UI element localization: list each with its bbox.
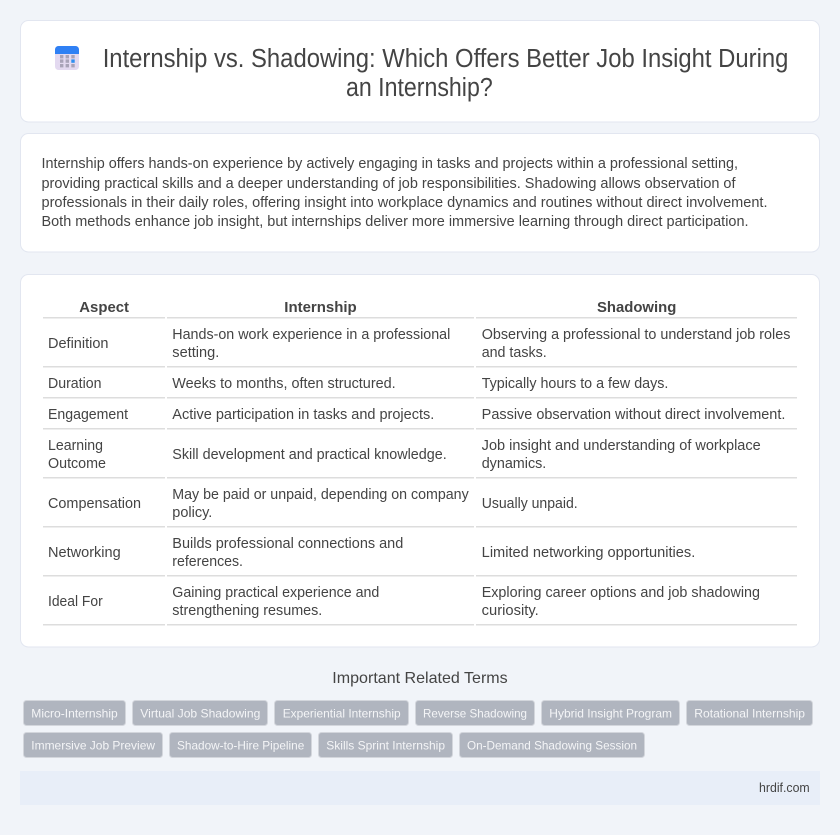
tag: shadow-to-hire pipeline: Shadow-to-Hire Pipeline: [177, 738, 305, 752]
row: learning outcome: dynamics.: [482, 456, 546, 472]
row: learning outcome: Skill development and practical knowledge.: [172, 447, 447, 463]
panel: introduction: [20, 134, 820, 252]
tag: experiential internship: Experiential Internship: [283, 706, 401, 720]
row: networking: references.: [172, 554, 243, 570]
table header: Internship: [284, 299, 357, 316]
tag: rotational internship: Rotational Internship: [694, 706, 805, 720]
row: duration: [48, 376, 668, 392]
row: networking: Builds professional connections and: [172, 536, 403, 552]
tag: reverse shadowing: Reverse Shadowing: [423, 706, 527, 720]
row: definition: setting.: [172, 345, 219, 361]
tag: reverse shadowing: [416, 700, 534, 726]
footer: [20, 771, 820, 805]
row: definition: and tasks.: [482, 345, 547, 361]
title: Internship vs. Shadowing: Which Offers Better Job Insight During: [103, 45, 788, 73]
row: ideal for: Ideal For: [48, 594, 103, 610]
tag: skills sprint internship: Skills Sprint Internship: [326, 738, 445, 752]
tag: virtual job shadowing: Virtual Job Shadowing: [140, 706, 260, 720]
footer: hrdif.com: [759, 780, 810, 795]
tag: immersive job preview: Immersive Job Preview: [31, 738, 155, 752]
tag: shadow-to-hire pipeline: [170, 732, 312, 758]
title: an Internship?: [346, 74, 493, 102]
table header: [79, 299, 676, 316]
row: engagement: Engagement: [48, 407, 128, 423]
text block: introduction paragraph: professionals in their daily roles, offering insight into workplace dynamics and routines without direct involvement.: [42, 195, 768, 211]
row: engagement: Passive observation without direct involvement.: [482, 407, 785, 423]
tag list: related terms: [24, 700, 812, 758]
table header: Shadowing: [597, 299, 676, 316]
tag: virtual job shadowing: [132, 700, 268, 726]
row: ideal for: Exploring career options and job shadowing: [482, 585, 760, 601]
row: definition: Definition: [48, 336, 108, 352]
row: learning outcome: Learning: [48, 438, 103, 454]
row: ideal for: strengthening resumes.: [172, 603, 322, 619]
row: learning outcome: [48, 438, 761, 472]
row: networking: Limited networking opportunities.: [482, 545, 695, 561]
tag: immersive job preview: [24, 732, 162, 758]
text block: introduction paragraph: Internship offers hands-on experience by actively engaging in tasks and projects within a professional setting,: [42, 156, 738, 172]
tag: rotational internship: [686, 700, 812, 726]
row: learning outcome: Job insight and understanding of workplace: [482, 438, 761, 454]
row: ideal for: curiosity.: [482, 603, 539, 619]
tag: on-demand shadowing session: [460, 732, 644, 758]
row: definition: [48, 327, 790, 361]
tag: hybrid insight program: Hybrid Insight Program: [549, 706, 672, 720]
row: ideal for: Gaining practical experience and: [172, 585, 379, 601]
text block: introduction paragraph: [42, 156, 768, 230]
row: learning outcome: Outcome: [48, 456, 106, 472]
row: networking: Networking: [48, 545, 121, 561]
panel: comparison table: [20, 274, 820, 647]
tag: skills sprint internship: [318, 732, 452, 758]
heading: important related terms: Important Related Terms: [332, 670, 508, 687]
row: networking: [48, 536, 695, 570]
tag: micro-internship: Micro-Internship: [31, 706, 118, 720]
tag: micro-internship: [24, 700, 126, 726]
row: duration: Weeks to months, often structured.: [172, 376, 396, 392]
row: compensation: policy.: [172, 505, 212, 521]
icon: calendar: [55, 46, 79, 70]
row: compensation: Compensation: [48, 496, 141, 512]
row: definition: Observing a professional to understand job roles: [482, 327, 790, 343]
row: duration: Typically hours to a few days.: [482, 376, 668, 392]
row: duration: Duration: [48, 376, 102, 392]
tag: on-demand shadowing session: On-Demand Shadowing Session: [467, 738, 637, 752]
text block: introduction paragraph: Both methods enhance job insight, but internships deliver more immersive learning through direct participation.: [42, 214, 748, 230]
table header: Aspect: [79, 299, 129, 316]
row: compensation: Usually unpaid.: [482, 496, 578, 512]
text block: introduction paragraph: providing practical skills and a deeper understanding of job responsibilities. Shadowing allows observation of: [42, 176, 737, 192]
title: [103, 45, 788, 102]
row: engagement: Active participation in tasks and projects.: [172, 407, 434, 423]
row: definition: Hands-on work experience in a professional: [172, 327, 450, 343]
tag: hybrid insight program: [542, 700, 680, 726]
row: ideal for: [48, 585, 760, 619]
panel: title card: [20, 20, 820, 122]
row: compensation: May be paid or unpaid, depending on company: [172, 487, 469, 503]
row: compensation: [48, 487, 578, 521]
tag: experiential internship: [274, 700, 408, 726]
row: engagement: [48, 407, 785, 423]
